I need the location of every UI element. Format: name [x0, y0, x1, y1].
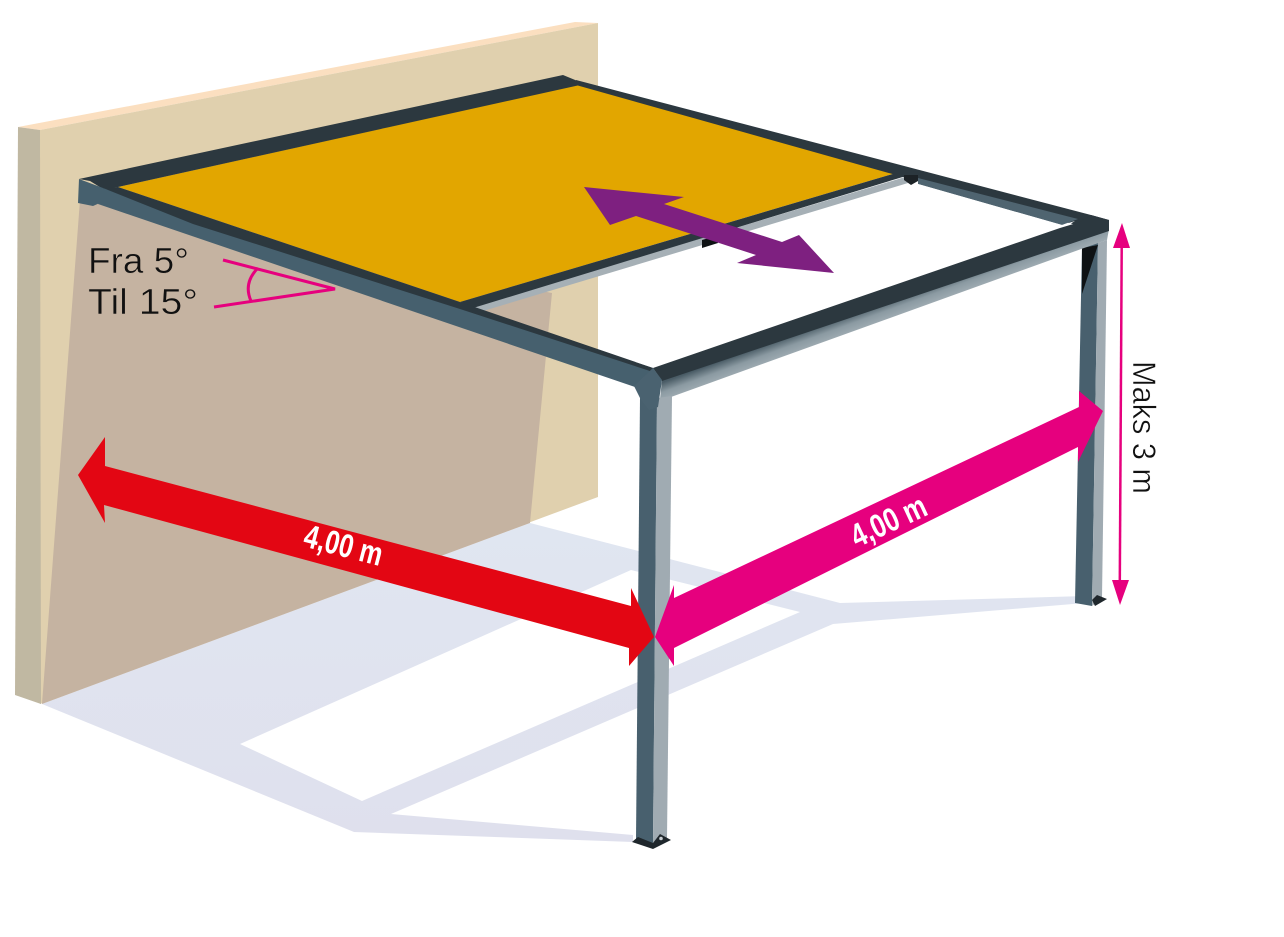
purple double arrow	[584, 187, 834, 273]
rear beam	[79, 75, 580, 189]
right-hand track	[576, 80, 1109, 229]
front right beam	[653, 215, 1109, 399]
canopy fabric	[118, 85, 896, 302]
front leg	[632, 396, 672, 849]
retracted fabric edge	[460, 173, 918, 312]
height label: Maks 3 m	[1126, 361, 1162, 494]
corner joint	[634, 368, 662, 410]
magenta width arrow	[655, 391, 1103, 666]
front left beam	[98, 187, 660, 387]
red width arrow: 4,00 m	[300, 517, 387, 573]
red width arrow	[78, 437, 654, 666]
left corner cap	[78, 179, 103, 206]
angle label	[88, 240, 198, 322]
pergola frame	[78, 75, 1109, 849]
angle label: Til 15°	[88, 281, 198, 322]
angle indicator	[214, 260, 335, 307]
wall	[15, 22, 598, 704]
angle label: Fra 5°	[88, 240, 189, 281]
ground shadow	[42, 523, 1085, 842]
height arrow	[1112, 223, 1130, 605]
back right leg	[1075, 240, 1107, 606]
magenta width arrow: 4,00 m	[844, 487, 932, 554]
